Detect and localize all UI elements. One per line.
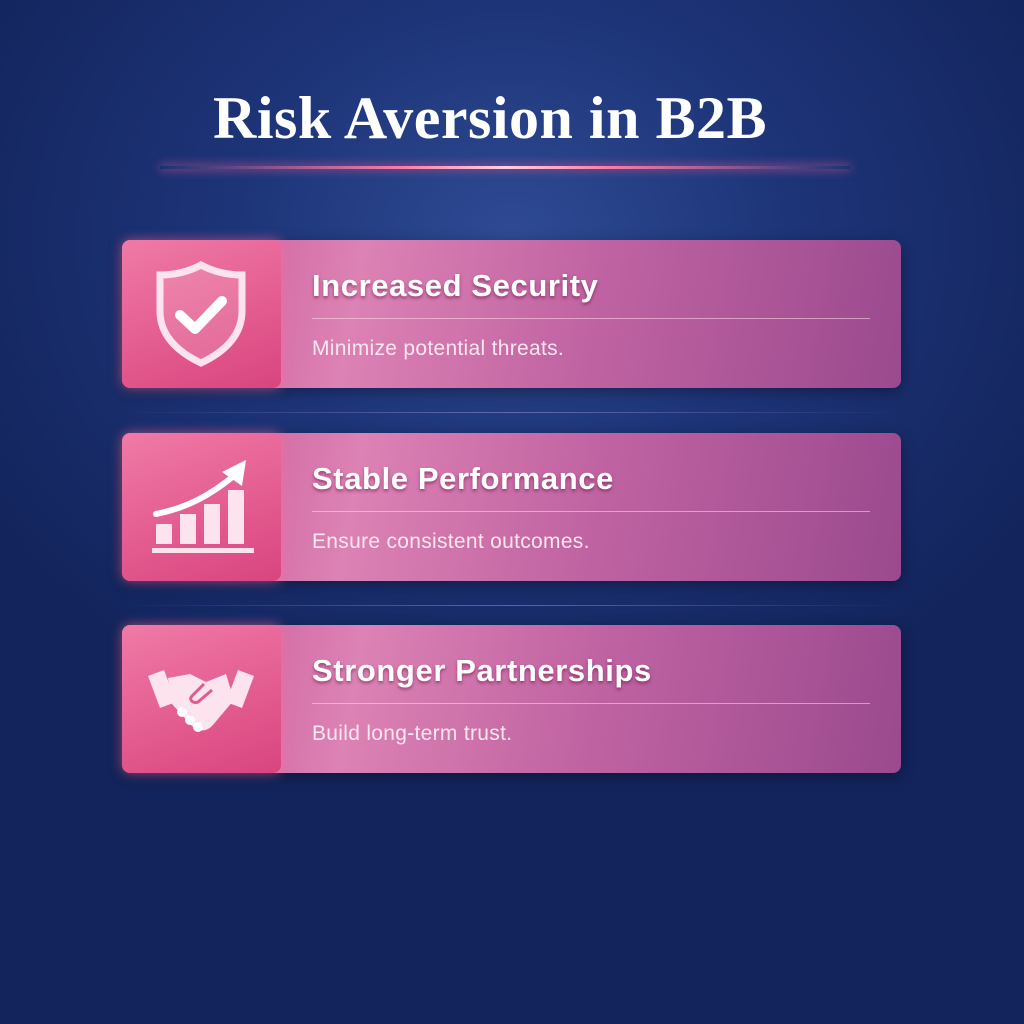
heading: Stronger Partnerships [312, 653, 652, 688]
icon: growth chart [122, 433, 281, 581]
panel: stable performance [122, 433, 901, 581]
title: Risk Aversion in B2B [213, 85, 767, 151]
text: Ensure consistent outcomes. [312, 530, 590, 553]
icon: handshake [122, 625, 281, 773]
panel: stronger partnerships [122, 625, 901, 773]
text: Build long-term trust. [312, 722, 512, 745]
panel: increased security [122, 240, 901, 388]
text: Minimize potential threats. [312, 337, 564, 360]
title glow underline [160, 166, 850, 169]
heading: Stable Performance [312, 461, 614, 496]
icon: shield [122, 240, 281, 388]
heading: Increased Security [312, 268, 599, 303]
